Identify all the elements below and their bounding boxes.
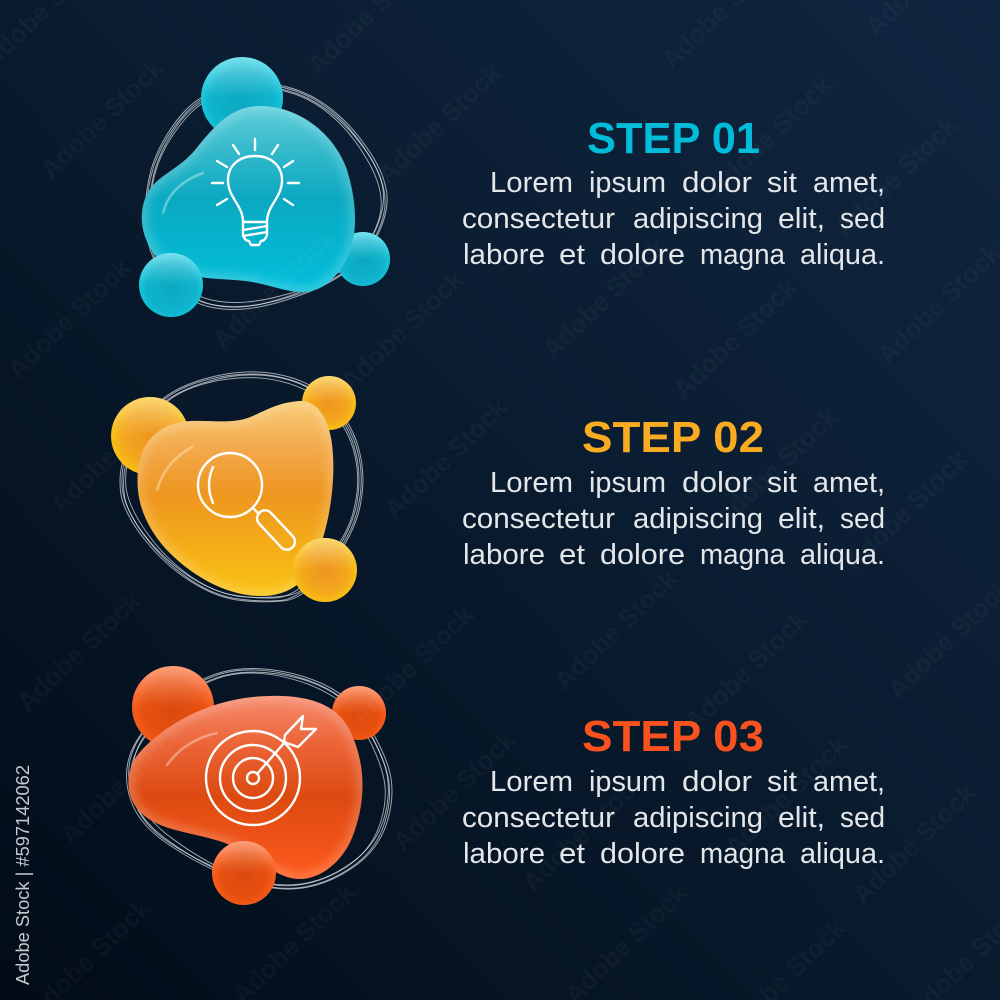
text block: step 01 body: [462, 167, 885, 271]
text block: step 01 body: labore: [463, 239, 545, 271]
heading: step 01: STEP 01: [587, 114, 760, 163]
blob 3 body: [128, 696, 363, 879]
watermark pattern: Adobe Stock: [344, 599, 480, 732]
text block: step 02 body: aliqua.: [800, 539, 885, 571]
watermark pattern: Adobe Stock: [1, 252, 137, 385]
text block: step 01 body: dolor: [682, 167, 753, 199]
text block: step 02 body: et: [559, 539, 585, 571]
watermark pattern: Adobe Stock: [334, 264, 470, 397]
watermark pattern: Adobe Stock: [11, 585, 147, 718]
watermark pattern: Adobe Stock: [386, 724, 522, 857]
text block: step 03 body: ipsum: [589, 766, 666, 798]
watermark pattern: Adobe Stock: [378, 392, 514, 525]
text block: step 03 body: labore: [463, 838, 545, 870]
panel: step 3 blob graphic: [125, 666, 394, 905]
text block: step 02 body: adipiscing: [633, 503, 763, 535]
text block: step 02 body: dolore: [600, 539, 685, 571]
text block: step 02 body: consectetur: [462, 503, 616, 535]
text block: step 02 body: dolor: [682, 467, 753, 499]
sphere top right: [302, 376, 356, 430]
watermark pattern: Adobe Stock: [371, 57, 507, 190]
text block: step 01 body: aliqua.: [800, 239, 885, 271]
watermark pattern: Adobe Stock: [678, 604, 814, 737]
heading: step 02: STEP 02: [582, 413, 764, 462]
text block: step 01 body: magna: [700, 239, 785, 271]
text block: step 03 body: aliqua.: [800, 838, 885, 870]
text block: step 01 body: dolore: [600, 239, 685, 271]
text block: step 01 body: consectetur: [462, 203, 616, 235]
icon: light bulb: [212, 139, 299, 245]
watermark pattern: Adobe Stock: [516, 765, 652, 898]
watermark pattern: Adobe Stock: [206, 222, 342, 355]
text block: step 03 body: elit,: [778, 802, 825, 834]
text block: step 01 body: Lorem: [490, 167, 573, 199]
watermark pattern: Adobe Stock: [702, 69, 838, 202]
text block: step 01 body: elit,: [778, 203, 825, 235]
watermark pattern: Adobe Stock: [667, 272, 803, 405]
text block: step 02 body: magna: [700, 539, 785, 571]
text block: step 01 body: sit: [767, 167, 797, 199]
watermark pattern: Adobe Stock: [828, 110, 964, 243]
text block: step 02 body: labore: [463, 539, 545, 571]
watermark pattern: Adobe Stock: [838, 444, 974, 577]
text block: step 01 body: adipiscing: [633, 203, 763, 235]
text block: step 03 body: consectetur: [462, 802, 616, 834]
sphere left: [111, 397, 189, 475]
watermark pattern: Adobe Stock: [548, 563, 684, 696]
panel: step 1 blob graphic: [139, 57, 390, 317]
text block: step 02 body: ipsum: [589, 467, 666, 499]
text block: step 03 body: sed: [840, 802, 885, 834]
text block: step 02 body: [462, 467, 885, 571]
blob 1 body: [142, 106, 355, 292]
text block: step 03 body: dolor: [682, 766, 753, 798]
text block: step 03 body: magna: [700, 838, 785, 870]
text block: step 03 body: sit: [767, 766, 797, 798]
panel: step 2 blob graphic: [111, 370, 365, 604]
sphere top right: [332, 686, 386, 740]
text block: step 02 body: sed: [840, 503, 885, 535]
text block: step 03 body: dolore: [600, 838, 685, 870]
sphere top: [201, 57, 283, 139]
side credit text: Adobe Stock | #597142062: [13, 765, 33, 985]
icon: target with arrow: [206, 716, 316, 825]
text block: step 03 body: adipiscing: [633, 802, 763, 834]
text block: step 03 body: Lorem: [490, 766, 573, 798]
text block: step 01 body: ipsum: [589, 167, 666, 199]
watermark pattern: Adobe Stock: [54, 717, 190, 850]
text block: step 02 body: sit: [767, 467, 797, 499]
icon: magnifying glass: [198, 453, 298, 553]
text block: step 02 body: elit,: [778, 503, 825, 535]
watermark pattern: Adobe Stock: [44, 387, 180, 520]
sketch rings around blob 1: [143, 81, 389, 312]
sphere right: [336, 232, 390, 286]
text block: step 03 body: [462, 766, 885, 870]
sketch rings around blob 3: [125, 666, 394, 892]
sphere bottom left: [139, 253, 203, 317]
text block: step 02 body: Lorem: [490, 467, 573, 499]
watermark pattern: Adobe Stock: [718, 729, 854, 862]
text block: step 03 body: et: [559, 838, 585, 870]
heading: step 03: STEP 03: [582, 712, 764, 761]
text block: step 01 body: et: [559, 239, 585, 271]
sphere top left: [132, 666, 214, 748]
blob 2 body: [137, 401, 333, 596]
text block: step 01 body: amet,: [813, 167, 885, 199]
watermark pattern: Adobe Stock: [536, 232, 672, 365]
watermark pattern: Adobe Stock: [846, 777, 982, 910]
sphere bottom right: [293, 538, 357, 602]
text block: step 01 body: sed: [840, 203, 885, 235]
watermark pattern: Adobe Stock: [34, 52, 170, 185]
text block: step 02 body: amet,: [813, 467, 885, 499]
watermark pattern: Adobe Stock: [708, 401, 844, 534]
text block: step 03 body: amet,: [813, 766, 885, 798]
sphere bottom: [212, 841, 276, 905]
sketch rings around blob 2: [118, 370, 365, 604]
